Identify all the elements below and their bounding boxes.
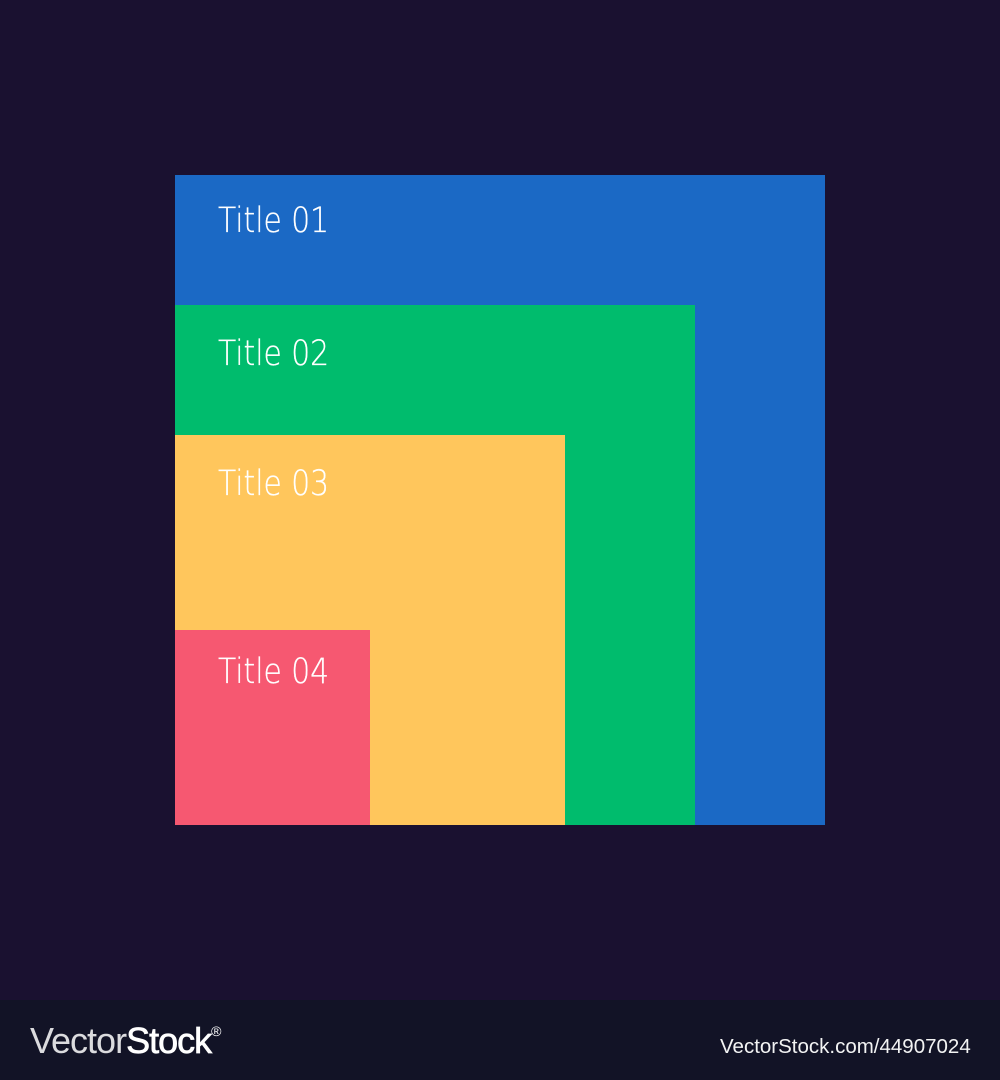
heading: Title 04: Title 04	[218, 652, 329, 692]
panel: nested squares chart	[175, 175, 825, 825]
text: image id: VectorStock.com/44907024	[720, 1035, 971, 1058]
panel: title 02 green square	[175, 305, 695, 825]
panel: title 03 yellow square	[175, 435, 565, 825]
footer bar	[0, 1000, 1000, 1080]
heading: Title 03: Title 03	[218, 464, 329, 504]
heading: Title 02: Title 02	[218, 334, 329, 374]
heading: Title 01: Title 01	[218, 201, 329, 241]
panel: title 01 blue square	[175, 175, 825, 825]
panel: title 04 pink square	[175, 630, 370, 825]
logo: VectorStock wordmark: VectorStock®	[30, 1020, 221, 1061]
